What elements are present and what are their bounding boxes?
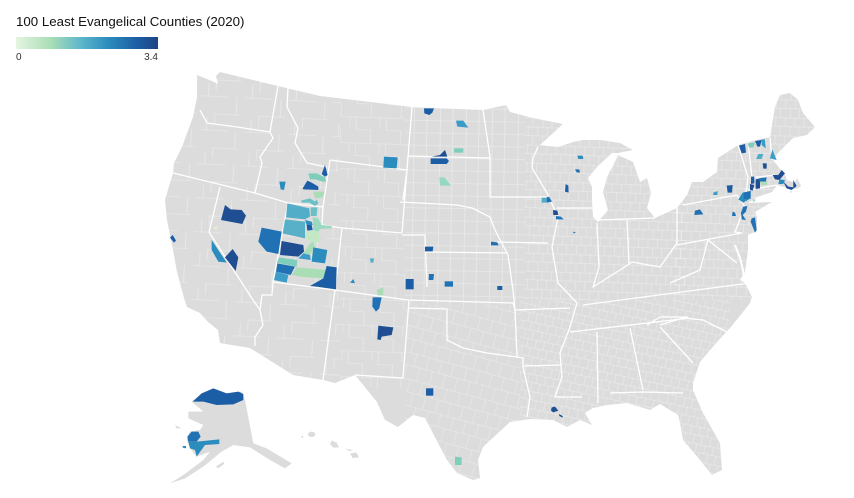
state borders <box>173 86 777 417</box>
highlighted counties: Great Basin and West Coast <box>170 205 282 271</box>
highlighted counties: Idaho, Utah, western Wyoming and Arizona strip <box>274 165 337 289</box>
Chesapeake Bay <box>735 245 744 280</box>
legend: colour scale 0 to 3.4: 3.4 <box>144 52 158 63</box>
highlighted counties: Northeast <box>694 139 797 233</box>
highlighted counties: Montana, Colorado plains and Great Plains <box>350 157 398 283</box>
Alaska highlighted boroughs <box>183 388 243 457</box>
legend: colour scale 0 to 3.4 <box>16 37 158 63</box>
map: Hawaii <box>301 432 359 458</box>
legend: colour scale 0 to 3.4: 0 <box>16 52 22 63</box>
title: 100 Least Evangelical Counties (2020) <box>16 14 244 29</box>
highlighted counties: New Mexico, Texas, Louisiana <box>372 286 563 465</box>
map: contiguous United States counties <box>160 60 820 485</box>
highlighted counties: Dakotas, Kansas, Nebraska, Wisconsin, Iowa <box>406 108 583 290</box>
map: Alaska <box>170 388 292 483</box>
